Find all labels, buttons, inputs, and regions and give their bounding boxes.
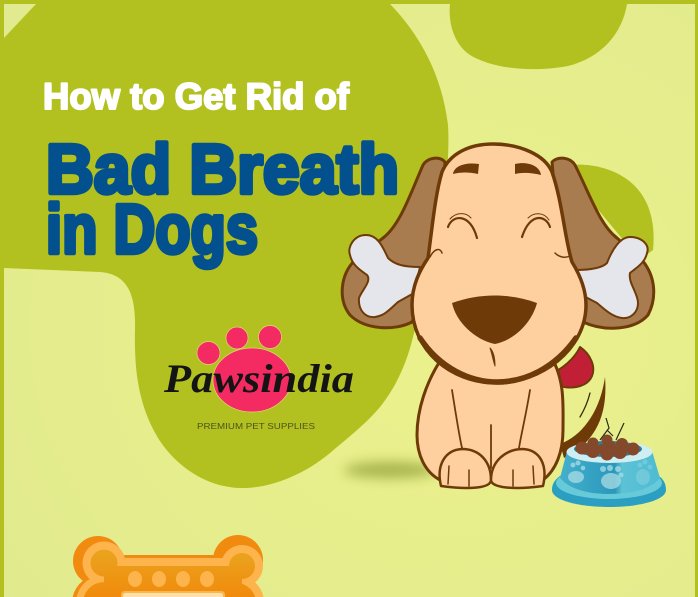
cheek creases	[430, 250, 570, 257]
food bowl	[552, 418, 666, 507]
bowl rim	[566, 441, 652, 463]
dog	[342, 144, 654, 488]
dog body	[417, 358, 563, 480]
chin line	[490, 348, 495, 366]
leg lines	[452, 390, 530, 468]
bowl base ring	[556, 467, 662, 499]
dog shadow	[344, 462, 436, 478]
right bone	[575, 237, 648, 318]
mouth	[452, 296, 537, 344]
orange bone sign	[73, 535, 263, 597]
bowl paw prints	[568, 460, 652, 489]
logo: Pawsindia	[163, 326, 354, 431]
bone light outline	[77, 542, 263, 597]
bone label	[121, 591, 225, 597]
logo tagline: PREMIUM PET SUPPLIES	[197, 422, 315, 431]
bowl body	[560, 451, 660, 494]
bone dots	[128, 571, 214, 587]
kibble	[576, 434, 640, 460]
left ear	[342, 158, 445, 328]
green blob: behind right ear	[570, 165, 654, 260]
happy eyes	[448, 218, 550, 238]
title: in Dogs	[46, 190, 258, 268]
dog head	[412, 144, 586, 383]
paws	[440, 449, 544, 488]
bone inner	[84, 550, 255, 597]
bowl base	[552, 472, 666, 507]
collar band	[420, 338, 576, 382]
logo wordmark: Pawsindia	[163, 356, 354, 401]
title: Bad Breath	[46, 130, 399, 208]
right ear	[552, 158, 654, 328]
title	[43, 76, 399, 268]
left bone	[349, 235, 420, 317]
icon: pink paw	[197, 326, 291, 412]
motion strokes	[600, 418, 624, 440]
green blob: top right	[450, 4, 627, 69]
eyebrows	[453, 163, 541, 175]
bone back layer	[73, 535, 263, 597]
bowl inner	[574, 441, 642, 457]
red collar tag	[548, 347, 593, 388]
green blob: main	[4, 4, 448, 488]
dog tail	[560, 377, 605, 458]
motion line	[580, 393, 590, 417]
title: How to Get Rid of	[43, 76, 350, 117]
